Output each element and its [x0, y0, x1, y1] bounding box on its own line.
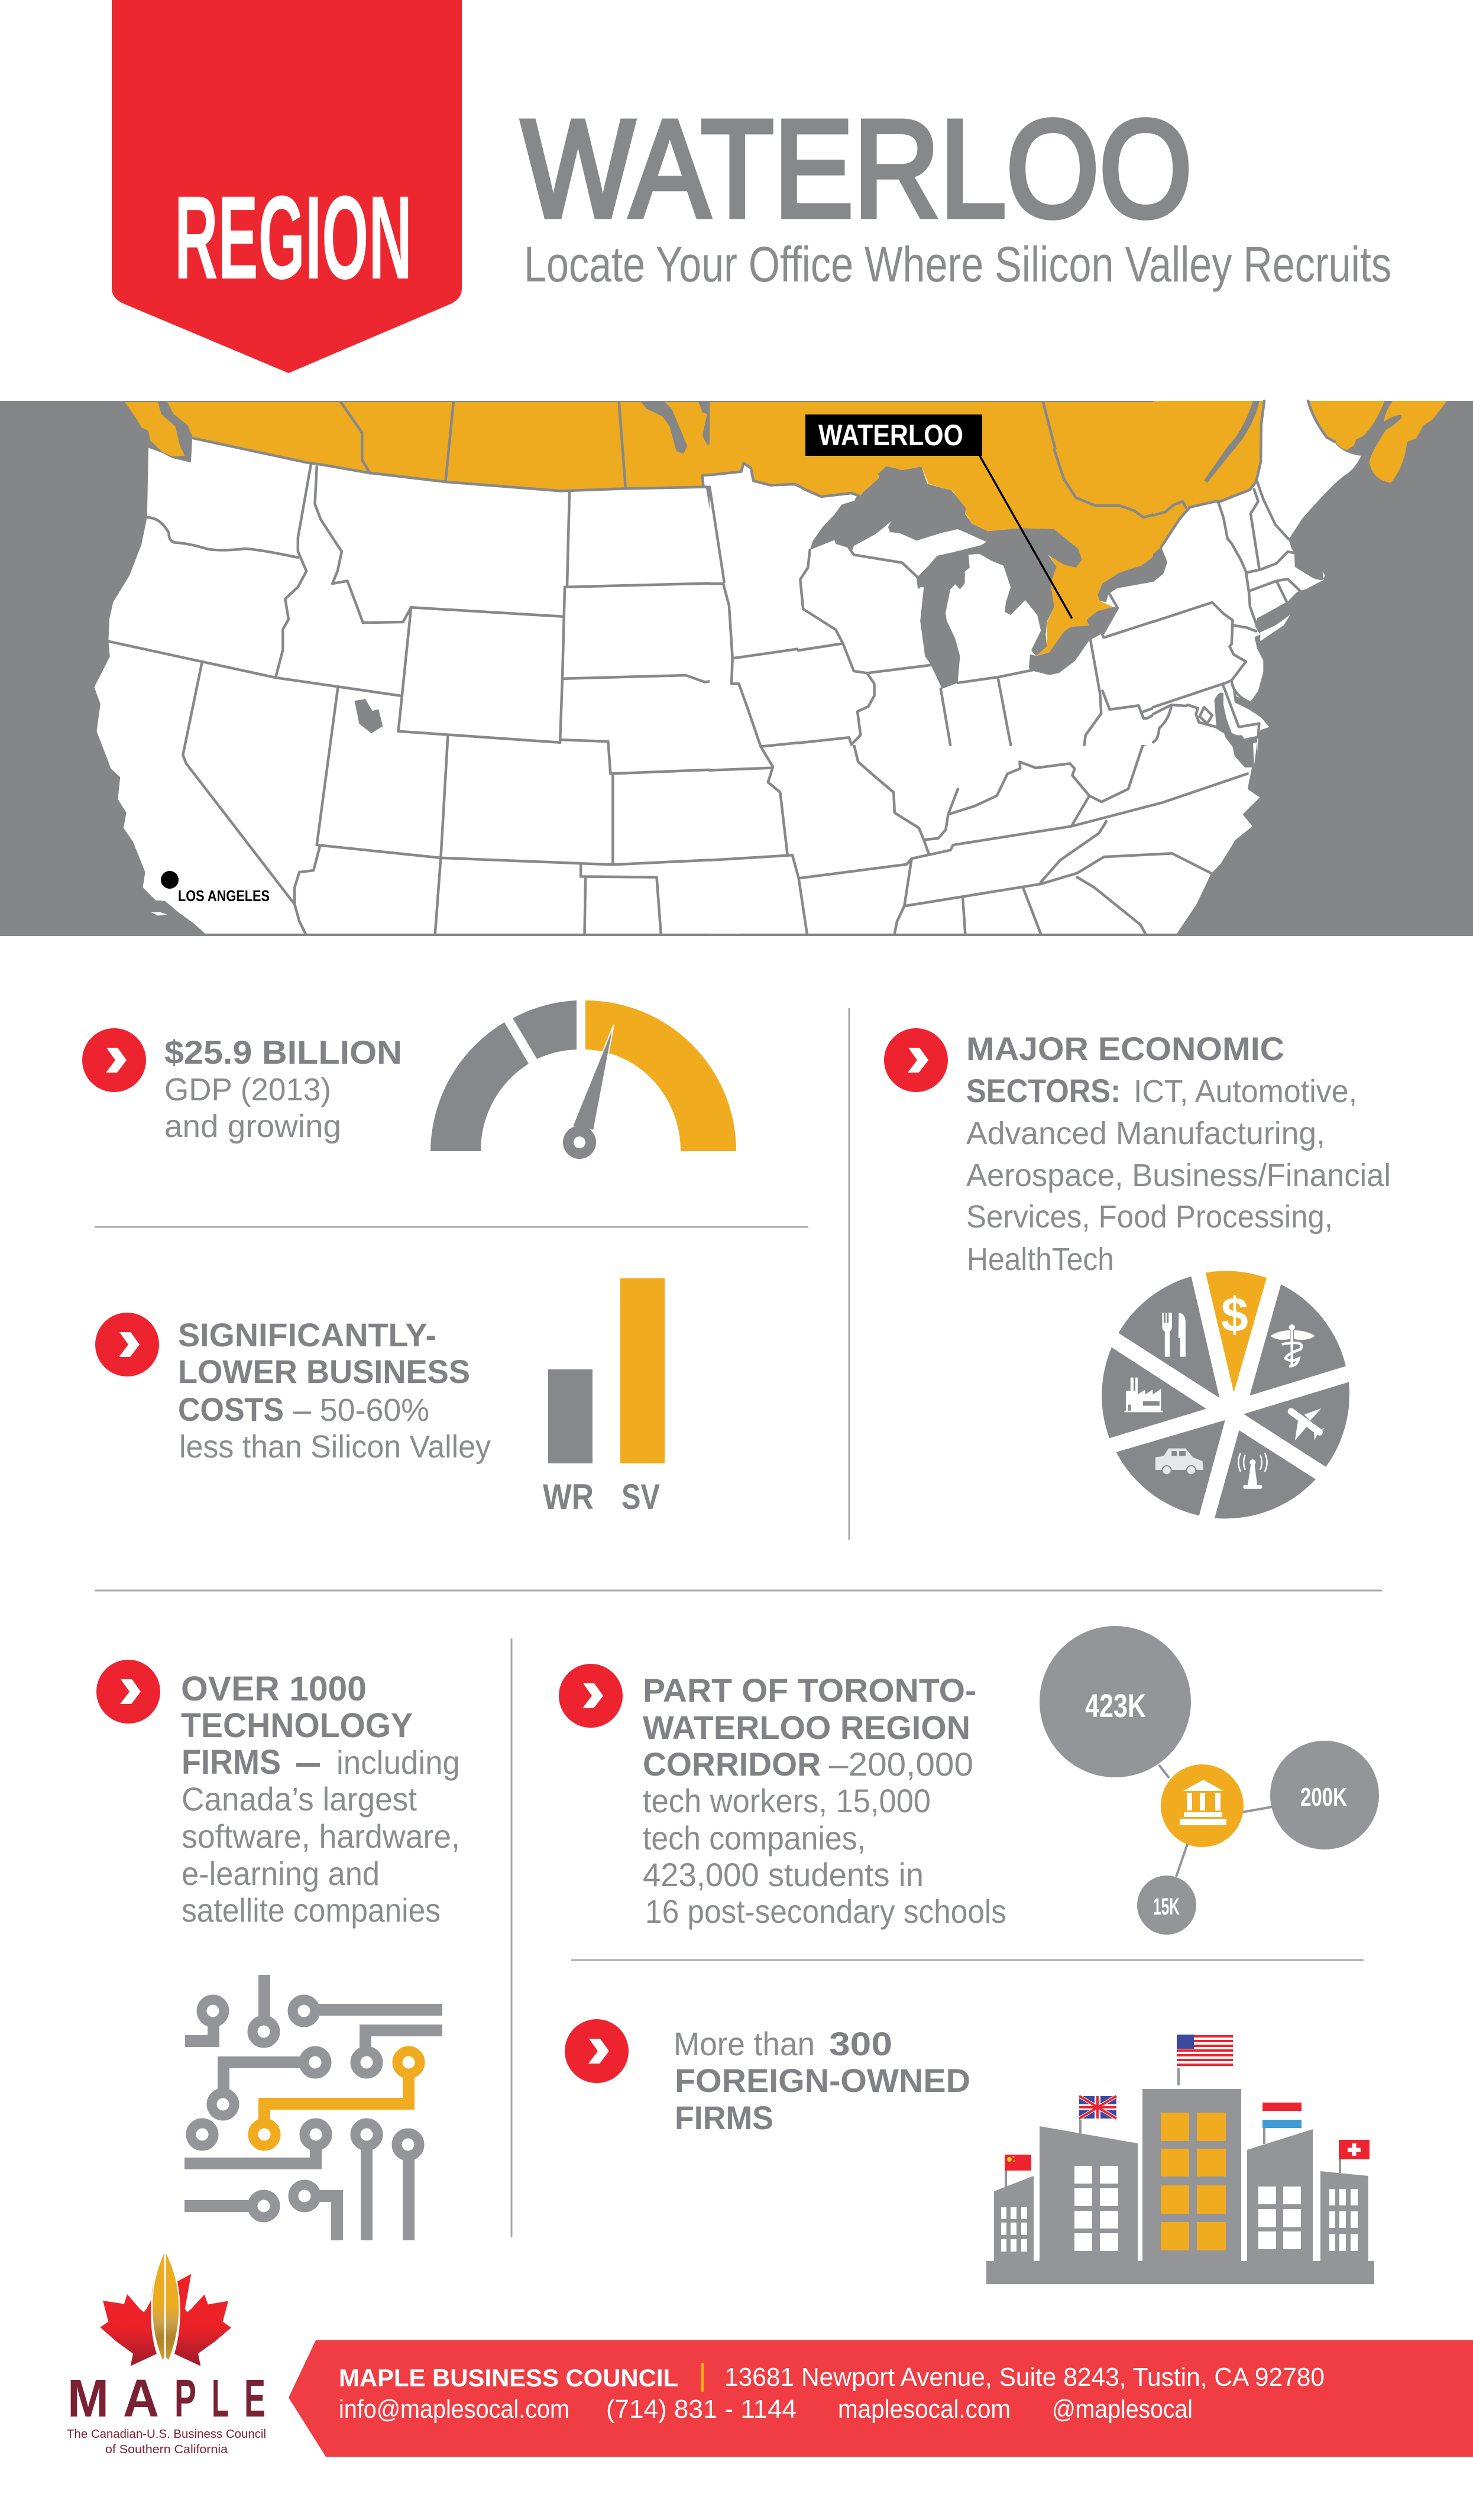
icon: UK flag	[1079, 2096, 1116, 2119]
icon: bank building	[1180, 1780, 1226, 1825]
sectors text	[966, 1030, 1391, 1277]
icon: GDP bullet	[82, 1028, 146, 1092]
foreign firms text	[674, 2025, 970, 2136]
tech firms text: FIRMS	[182, 1743, 281, 1782]
bubble chart	[1040, 1626, 1379, 1935]
bar chart: WR	[543, 1477, 594, 1517]
panel: Toronto-Waterloo corridor	[559, 1626, 1379, 1935]
footer contact band: (714) 831 - 1144	[606, 2395, 797, 2424]
footer contact band: @maplesocal	[1052, 2395, 1193, 2424]
tech firms text: e-learning and	[182, 1855, 380, 1892]
icon: corridor bullet	[559, 1664, 623, 1728]
icon: foreign firms bullet	[565, 2019, 629, 2083]
corridor text: WATERLOO REGION	[643, 1709, 970, 1746]
foreign firms text: More than	[674, 2025, 815, 2062]
bar chart: SV	[621, 1477, 660, 1517]
corridor text: tech workers, 15,000	[643, 1782, 931, 1819]
icon: dollar: $	[1221, 1287, 1248, 1342]
tech firms text: including	[336, 1744, 460, 1781]
logo tagline	[67, 2428, 266, 2456]
corridor text: –200,000	[829, 1745, 973, 1783]
icon: Luxembourg flag	[1262, 2103, 1302, 2128]
map detail: Great Lakes region	[798, 449, 1177, 745]
costs text: SIGNIFICANTLY-	[178, 1316, 436, 1353]
icon: fork and knife	[1162, 1313, 1186, 1357]
corridor text: CORRIDOR	[643, 1745, 821, 1783]
icon: factory	[1125, 1378, 1163, 1412]
corridor text	[643, 1672, 1006, 1930]
foreign firms text: 300	[829, 2025, 892, 2062]
tech firms text: OVER 1000	[181, 1670, 367, 1708]
tech firms text: Canada’s largest	[182, 1780, 417, 1818]
title: WATERLOO: WATERLOO	[522, 91, 1192, 246]
sectors text: Services, Food Processing,	[966, 1199, 1333, 1235]
icon: caduceus	[1270, 1324, 1315, 1366]
logo wordmark: P	[174, 2369, 196, 2428]
costs text: COSTS	[178, 1391, 284, 1428]
footer contact band: 13681 Newport Avenue, Suite 8243, Tustin, CA 92780	[724, 2363, 1325, 2392]
logo wordmark: M	[67, 2369, 109, 2428]
foreign firms text: FOREIGN-OWNED	[675, 2062, 970, 2099]
footer contact band	[289, 2340, 1473, 2457]
GDP text: GDP (2013)	[164, 1072, 331, 1107]
foreign firms text: FIRMS	[675, 2099, 773, 2136]
costs text: – 50-60%	[293, 1392, 429, 1428]
GDP text: and growing	[164, 1109, 341, 1144]
callout: WATERLOO pointer line	[980, 456, 1072, 618]
tech firms text: TECHNOLOGY	[181, 1706, 413, 1745]
corridor text: 16 post-secondary schools	[645, 1893, 1006, 1930]
icon: costs bullet	[95, 1313, 159, 1376]
logo wordmark: A	[123, 2369, 159, 2428]
GDP text: $25.9 BILLION	[164, 1034, 402, 1071]
map detail: northeast coast	[1153, 401, 1473, 767]
logo wordmark: E	[244, 2369, 266, 2428]
bubble chart: 15K	[1153, 1894, 1180, 1920]
bar chart	[543, 1278, 665, 1517]
footer contact band: maplesocal.com	[838, 2395, 1011, 2424]
icon: maple leaf	[100, 2253, 231, 2366]
logo tagline: The Canadian-U.S. Business Council	[67, 2428, 266, 2441]
icon: Swiss flag	[1339, 2140, 1370, 2159]
icon: US flag	[1177, 2035, 1233, 2066]
sectors text: MAJOR ECONOMIC	[966, 1030, 1284, 1067]
costs text	[178, 1316, 491, 1465]
header banner: REGION	[112, 0, 462, 373]
sectors text: Advanced Manufacturing,	[966, 1116, 1325, 1151]
logo wordmark: L	[212, 2369, 229, 2428]
panel: foreign-owned firms	[565, 2019, 1374, 2284]
costs text: less than Silicon Valley	[179, 1429, 491, 1465]
bubble chart: 200K	[1300, 1783, 1347, 1812]
tech firms text: satellite companies	[182, 1891, 441, 1929]
sectors text: Aerospace, Business/Financial	[966, 1158, 1391, 1193]
footer contact band: info@maplesocal.com	[339, 2395, 569, 2424]
map marker: Los Angeles: LOS ANGELES	[178, 887, 270, 905]
logo wordmark	[67, 2369, 266, 2428]
corridor text: tech companies,	[643, 1819, 866, 1857]
map: North America	[0, 401, 1473, 936]
tech firms text: software, hardware,	[182, 1818, 460, 1855]
corridor text: PART OF TORONTO-	[643, 1672, 976, 1709]
icon: antenna tower	[1238, 1453, 1267, 1489]
logo: MAPLE	[67, 2253, 266, 2456]
costs text: LOWER BUSINESS	[178, 1353, 470, 1390]
sectors text: ICT, Automotive,	[1134, 1074, 1357, 1109]
sectors text: SECTORS:	[966, 1072, 1121, 1109]
icon: city buildings with flags	[986, 2035, 1374, 2284]
sectors text: HealthTech	[967, 1242, 1114, 1277]
icon: China flag	[1005, 2155, 1031, 2171]
footer contact band: MAPLE BUSINESS COUNCIL	[339, 2364, 678, 2392]
GDP text	[164, 1034, 402, 1144]
icon: car	[1155, 1449, 1203, 1475]
panel: business costs	[95, 1278, 665, 1517]
tech firms text	[181, 1670, 460, 1929]
header banner: REGION: REGION	[174, 171, 412, 304]
panel: GDP	[82, 1000, 736, 1159]
icon: circuit board	[184, 1975, 442, 2240]
gauge chart	[430, 1000, 736, 1159]
icon: airplane	[1291, 1408, 1325, 1440]
callout: WATERLOO label: WATERLOO	[818, 419, 963, 452]
corridor text: 423,000 students in	[643, 1856, 924, 1893]
panel: technology firms	[96, 1660, 460, 2240]
pie chart: sectors	[1102, 1271, 1349, 1518]
bubble chart: 423K	[1085, 1687, 1146, 1724]
logo tagline: of Southern California	[105, 2443, 228, 2456]
panel: economic sectors	[884, 1028, 1391, 1518]
icon: sectors bullet	[884, 1028, 948, 1092]
icon: tech bullet	[96, 1660, 160, 1724]
map marker: Los Angeles	[161, 871, 270, 905]
